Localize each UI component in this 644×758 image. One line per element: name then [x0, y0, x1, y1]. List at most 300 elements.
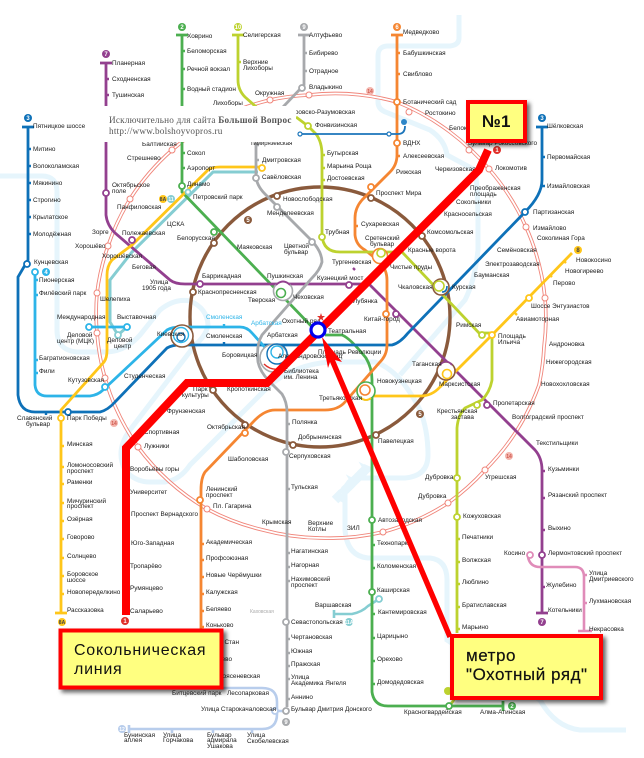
station labels: Кутузовская: [68, 377, 105, 384]
station labels: Площадь: [498, 333, 526, 340]
station labels: Митино: [33, 146, 56, 153]
station labels: Волжская: [462, 557, 491, 564]
station labels: Марьино: [462, 624, 489, 631]
station labels: Сретенский: [365, 234, 400, 242]
station labels: Новокосино: [576, 257, 612, 264]
station labels: Лихоборы: [243, 64, 273, 72]
station labels: Электрозаводская: [485, 261, 540, 268]
line number badges: 14: [506, 454, 512, 460]
station labels: Нагатинская: [291, 548, 328, 555]
station labels: Домодедовская: [377, 679, 424, 686]
monorail: [300, 126, 405, 134]
watermark: Исключительно для сайта Большой Вопрос: [109, 115, 292, 125]
station labels: Люблино: [462, 578, 489, 586]
station labels: Авиамоторная: [516, 316, 560, 323]
station labels: Новопеределкино: [67, 589, 121, 596]
station labels: Ботанический сад: [403, 98, 457, 106]
line 1 end badges: [121, 146, 501, 625]
station labels: Строгино: [33, 197, 61, 204]
station labels: Арбатская: [267, 331, 298, 339]
line number badges: 12: [119, 727, 125, 733]
station labels: проспект: [67, 503, 94, 510]
station labels: Верхние: [308, 520, 334, 527]
station labels: Проспект Вернадского: [131, 511, 198, 518]
station labels: Волгоградский проспект: [512, 413, 584, 421]
station labels: Лухмановская: [589, 598, 632, 605]
station labels: Деловой: [67, 331, 93, 339]
station labels: Савёловская: [262, 174, 302, 181]
station labels: им. Ленина: [284, 374, 318, 381]
station labels: Ломоносовский: [67, 461, 113, 469]
station labels: Беговая: [132, 264, 156, 271]
station labels: Преображенская: [470, 184, 521, 192]
station labels: Сокол: [187, 150, 205, 157]
station labels: Юго-Западная: [131, 540, 175, 547]
station labels: Смоленская: [206, 314, 243, 321]
watermark: http://www.bolshoyvopros.ru: [109, 126, 223, 136]
station labels: Добрынинская: [298, 433, 342, 441]
line number badges: 8: [576, 248, 580, 254]
station labels: Новоясеневская: [211, 673, 261, 680]
station labels: Парк: [193, 386, 208, 393]
interchange complex: Chistye Prudy: [372, 248, 388, 264]
station labels: Водный стадион: [187, 85, 236, 93]
station labels: Хорошёвская: [102, 253, 143, 260]
station labels: Царицыно: [377, 633, 408, 640]
station labels: Орехово: [377, 656, 403, 663]
line 11a: turquoise south: [334, 599, 379, 618]
line number badges: 11: [168, 197, 174, 203]
station labels: Каширская: [377, 587, 410, 594]
station labels: Ясенево: [207, 656, 232, 663]
line 11: turquoise: [110, 172, 258, 335]
station labels: Бунинская: [124, 732, 156, 739]
line number badges: 3: [540, 116, 544, 122]
station labels: Мичуринский: [67, 497, 107, 505]
station ticks: [28, 51, 587, 699]
station labels: Парк Победы: [67, 414, 107, 422]
station labels: Цветной: [284, 242, 309, 250]
interchange stations: [24, 85, 545, 714]
station labels: Бульвар Рокоссовского: [468, 140, 537, 147]
callout: Sokolnicheskaya line: линия: [74, 661, 122, 678]
station labels: Планерная: [112, 60, 146, 67]
line number badges: 9: [284, 720, 288, 726]
station labels: Лермонтовский проспект: [548, 549, 622, 557]
line number badges: 11А: [345, 620, 354, 626]
line 13: Nekrasovka pink: [528, 557, 592, 631]
station labels: Окружная: [255, 90, 285, 97]
station labels: Крымская: [262, 519, 292, 526]
station labels: Октябрьское: [112, 181, 150, 189]
station labels: Крестьянская: [437, 408, 478, 415]
station labels: Улица Старокачаловская: [201, 706, 277, 713]
station labels: Алтуфьево: [309, 32, 343, 39]
station labels: Красногвардейская: [404, 708, 462, 716]
station labels: Беляево: [206, 606, 232, 613]
watermark: [100, 106, 296, 142]
station labels: Солнцево: [67, 553, 97, 560]
station labels: Котлы: [308, 526, 327, 533]
interchange complex: Kievskaya: [171, 325, 193, 347]
station labels: Измайлово: [533, 224, 567, 232]
interchange complex: Pushkinskaya: [274, 282, 292, 300]
station labels: Сокольники: [456, 199, 491, 206]
station labels: Отрадное: [309, 68, 339, 75]
station labels: центр (МЦК): [57, 338, 94, 345]
station labels: Кузьминки: [548, 466, 579, 473]
station labels: Крылатское: [33, 214, 68, 221]
station labels: Шаболовская: [228, 455, 269, 463]
station labels: Краснопресненская: [198, 289, 257, 296]
line 12: Butovo: [129, 688, 286, 733]
station labels: Чистые пруды: [390, 264, 433, 271]
station labels: Медведково: [403, 29, 440, 36]
station labels: Партизанская: [533, 209, 575, 216]
station labels: Проспект Мира: [376, 190, 422, 197]
station labels: Славянский: [17, 414, 53, 422]
station labels: Южная: [291, 648, 313, 655]
callout: Sokolnicheskaya line: [60, 630, 222, 688]
station labels: Владыкино: [309, 84, 343, 91]
station labels: Горчакова: [163, 737, 194, 744]
station labels: Баррикадная: [202, 273, 242, 280]
station labels: Беломорская: [187, 48, 227, 55]
station labels: Фрунзенская: [167, 408, 206, 415]
line number badges: 9: [302, 25, 306, 31]
station labels: Лужники: [144, 443, 170, 450]
station labels: Рассказовка: [67, 607, 104, 614]
station labels: Полянка: [292, 419, 318, 426]
line 10: lime: [232, 35, 492, 707]
station labels: аллея: [124, 737, 143, 744]
line number badges: 5: [418, 412, 422, 418]
station labels: Охотный ряд: [282, 317, 321, 325]
station labels: Молодёжная: [33, 231, 72, 238]
station labels: Университет: [130, 489, 167, 496]
station labels: Варшавская: [315, 602, 352, 609]
station labels: Нахимовский: [291, 575, 331, 583]
station labels: Улица: [163, 732, 182, 739]
station labels: Пролетарская: [493, 400, 535, 407]
station labels: Саларьево: [130, 608, 163, 615]
line number badges: 2: [180, 25, 184, 31]
station labels: Озёрная: [67, 516, 93, 523]
station labels: Косино: [504, 550, 526, 557]
station labels: Семёновская: [497, 247, 537, 254]
station labels: Волоколамская: [33, 163, 80, 170]
station labels: застава: [451, 414, 474, 421]
line 5: brown ring: [190, 187, 450, 447]
station labels: Дмитриевского: [589, 576, 634, 583]
station labels: Третьяковская: [319, 395, 363, 402]
station labels: Красносельская: [444, 211, 492, 218]
station labels: Дмитровская: [262, 157, 301, 164]
station labels: Новослободская: [283, 195, 333, 203]
station labels: Студенческая: [124, 373, 166, 380]
station labels: Верхние: [243, 59, 269, 66]
station labels: Киевская: [157, 331, 185, 338]
station labels: Тверская: [248, 297, 276, 304]
line 1 end badges: 1: [123, 619, 127, 625]
station labels: Измайловская: [547, 182, 590, 190]
station labels: Алексеевская: [403, 153, 445, 160]
station labels: Чертановская: [291, 634, 333, 641]
station labels: Международная: [57, 314, 106, 321]
station labels: Лесопарковая: [227, 690, 269, 697]
station labels: Раменки: [67, 479, 93, 486]
callout: Sokolnicheskaya line: Сокольническая: [74, 642, 206, 659]
station labels: Улица: [247, 732, 266, 739]
station labels: Чкаловская: [398, 284, 433, 291]
line number badges: 3: [26, 116, 30, 122]
station labels: Аннино: [291, 694, 313, 701]
station labels: Бауманская: [474, 272, 510, 279]
station labels: Таганская: [412, 361, 442, 368]
station labels: Первомайская: [547, 153, 591, 161]
station labels: Филёвский парк: [39, 289, 87, 297]
station labels: Бульвар Дмитрия Донского: [291, 706, 372, 713]
callout: line number: [468, 102, 525, 141]
line 6: orange: [201, 35, 403, 680]
station labels: Марксистская: [439, 381, 481, 388]
station labels: Свиблово: [403, 70, 433, 78]
line 7: purple: [100, 63, 548, 613]
station labels: Тимирязевская: [250, 141, 292, 147]
line 2: green: [176, 35, 503, 711]
station labels: Серпуховская: [289, 453, 331, 460]
station labels: Каховская: [250, 609, 274, 615]
station labels: ВДНХ: [403, 140, 421, 147]
station labels: Лихоборы: [213, 99, 243, 107]
station labels: Тропарёво: [130, 563, 162, 570]
line number badges: 8А: [59, 620, 66, 626]
station labels: бульвар: [370, 240, 395, 248]
station labels: Менделеевская: [267, 210, 314, 217]
station labels: Спортивная: [144, 429, 180, 436]
station labels: Белорусская: [177, 235, 215, 242]
station labels: бульвар: [26, 420, 51, 428]
river label: МОСКВА-РЕКА: [335, 466, 371, 501]
highlighted Sokolnicheskaya line: [126, 150, 488, 615]
station labels: Нагорная: [291, 562, 320, 569]
station labels: Перово: [553, 280, 576, 287]
station labels: Сходненская: [112, 76, 151, 83]
line 3: dark blue: [18, 127, 548, 412]
station labels: Тульская: [291, 484, 318, 491]
station labels: Алма-Атинская: [480, 709, 526, 716]
station labels: Кожуховская: [463, 513, 501, 520]
station labels: центр: [114, 343, 132, 350]
station labels: Улица: [291, 674, 310, 681]
line 9: grey: [256, 35, 322, 707]
station labels: Выставочная: [117, 314, 157, 321]
station labels: Бабушкинская: [403, 49, 446, 57]
station labels: Площадь Революции: [318, 349, 382, 356]
arrow to Okhotny Ryad: [322, 337, 452, 638]
station labels: Калужская: [206, 589, 238, 596]
interchange complex: Taganskaya: [437, 362, 455, 380]
station labels: проспект: [291, 582, 318, 589]
station labels: проспект: [206, 492, 233, 499]
station labels: Римская: [456, 322, 482, 329]
station labels: Академика Янгеля: [291, 680, 347, 687]
station labels: Марьина Роща: [327, 163, 372, 170]
interchange complex: Novokuznetskaya: [357, 382, 375, 400]
station labels: Скобелевская: [247, 737, 289, 745]
line number badges: 5: [246, 218, 250, 224]
station labels: Новокузнецкая: [377, 378, 422, 385]
station labels: Сухаревская: [361, 221, 400, 228]
station labels: Боровицкая: [222, 352, 258, 359]
station labels: Тушинская: [112, 92, 145, 99]
line number badges: 14: [367, 89, 373, 95]
station labels: Некрасовка: [589, 626, 624, 633]
station labels: Лубянка: [353, 297, 378, 305]
station labels: Ушакова: [207, 743, 233, 750]
station labels: Битцевский парк: [172, 689, 222, 697]
station labels: Селигерская: [243, 32, 281, 39]
station labels: Новохохловская: [541, 381, 590, 388]
station labels: Улица: [589, 570, 608, 577]
station labels: бульвар: [284, 248, 309, 256]
station labels: Угрешская: [485, 474, 517, 481]
station labels: Бутырская: [327, 150, 359, 157]
station labels: Стрешнево: [127, 155, 161, 162]
station labels: 1905 года: [142, 285, 171, 292]
station labels: шоссе: [67, 577, 86, 584]
station labels: Смоленская: [206, 333, 243, 340]
line number badges: 8А: [160, 197, 167, 203]
station labels: Маяковская: [237, 244, 273, 251]
station labels: Новые Черёмушки: [206, 572, 262, 579]
callout: Okhotny Ryad station: метро: [466, 646, 516, 665]
station labels: Ильича: [498, 339, 521, 346]
station labels: Профсоюзная: [206, 555, 249, 562]
station labels: проспект: [67, 468, 94, 475]
station labels: Кунцевская: [34, 259, 69, 266]
station labels: Тургеневская: [332, 259, 372, 266]
station marker: Okhotny Ryad: [311, 313, 325, 337]
station labels: Балтийская: [142, 140, 177, 148]
station labels: Трубная: [325, 228, 350, 236]
station labels: Петровско-Разумовская: [284, 109, 356, 116]
station labels: Бибирево: [309, 49, 338, 57]
station labels: Черкизовская: [435, 166, 476, 173]
station labels: Рязанский проспект: [548, 491, 607, 499]
station labels: Павелецкая: [378, 438, 414, 445]
station labels: Пушкинская: [267, 273, 303, 280]
station labels: адмирала: [207, 737, 237, 744]
station labels: Текстильщики: [536, 440, 578, 447]
station labels: Динамо: [187, 181, 210, 188]
station labels: Кузнецкий мост: [317, 274, 363, 282]
station labels: Багратионовская: [39, 355, 90, 362]
station labels: Петровский парк: [193, 193, 243, 201]
interchange complex: Kurskaya: [433, 279, 449, 295]
station labels: Белокаменная: [449, 125, 493, 132]
station labels: Чеховская: [293, 294, 324, 301]
station labels: Соколиная Гора: [537, 235, 585, 242]
station labels: ЗИЛ: [347, 525, 360, 532]
station labels: Говорово: [67, 534, 95, 541]
station labels: Рижская: [396, 169, 422, 176]
line number badges: 2: [510, 704, 514, 710]
station labels: Хорошёво: [75, 243, 106, 250]
station labels: культуры: [182, 392, 209, 399]
station labels: Театральная: [328, 328, 367, 335]
station labels: Воробьёвы горы: [130, 465, 180, 473]
line number badges: 7: [540, 620, 544, 626]
station labels: Библиотека: [284, 367, 319, 375]
station labels: Кропоткинская: [227, 386, 271, 393]
station labels: Пятницкое шоссе: [33, 123, 86, 130]
line 4: light blue: [35, 272, 270, 396]
line number badges: 10: [235, 25, 242, 31]
station labels: Деловой: [107, 336, 133, 344]
station labels: Шелепиха: [100, 296, 131, 303]
station labels: Улица: [150, 279, 169, 286]
station labels: Мякинино: [33, 180, 63, 187]
callout: Okhotny Ryad station: "Охотный ряд": [466, 665, 588, 684]
station labels: Дубровка: [418, 492, 447, 500]
station labels: Александровский сад: [278, 352, 343, 360]
station labels: Аэропорт: [187, 165, 215, 172]
station labels: Фонвизинская: [315, 122, 358, 129]
station labels: Комсомольская: [427, 229, 474, 236]
station labels: Арбатская: [251, 319, 282, 327]
station labels: Ленинский: [206, 485, 238, 493]
station labels: Зорге: [92, 229, 109, 236]
station labels: Тёплый Стан: [200, 638, 239, 646]
station labels: Нижегородская: [546, 359, 592, 366]
station labels: Печатники: [462, 534, 493, 541]
station labels: Коломенская: [377, 563, 417, 570]
station labels: ЦСКА: [167, 221, 185, 228]
station labels: Технопарк: [377, 540, 408, 547]
station labels: Китай-город: [364, 315, 400, 323]
station labels: Полежаевская: [122, 230, 166, 237]
station labels: Фили: [39, 368, 55, 375]
line number badges: 7: [104, 52, 108, 58]
station labels: Кантемировская: [378, 609, 427, 616]
line number badges: 6: [395, 25, 399, 31]
station labels: поле: [112, 188, 127, 195]
station labels: Достоевская: [327, 175, 365, 182]
station labels: Панфиловская: [117, 204, 162, 211]
station labels: Ростокино: [425, 110, 456, 117]
station labels: Шёлковская: [547, 123, 584, 130]
line 14: Moscow Central Circle: [94, 92, 548, 538]
line number badges: 4: [44, 270, 48, 276]
callout: Okhotny Ryad station: [452, 636, 601, 698]
station labels: Минская: [67, 441, 93, 448]
station labels: Коньково: [206, 622, 234, 629]
interchange complex: Arbatskaya and Biblioteka: [260, 344, 288, 372]
station labels: Курская: [452, 284, 476, 291]
station labels: Дубровка: [425, 473, 454, 481]
station labels: Пл. Гагарина: [213, 503, 252, 510]
station labels: Красные ворота: [408, 247, 456, 254]
station labels: Речной вокзал: [187, 65, 230, 73]
callout: line number: №1: [482, 112, 510, 131]
station labels: Братиславская: [462, 602, 507, 609]
station labels: Пражская: [291, 661, 321, 668]
station labels: Севастопольская: [291, 619, 343, 626]
station labels: Румянцево: [130, 585, 163, 592]
station labels: Боровское: [67, 571, 99, 578]
station labels: Выхино: [548, 525, 571, 532]
